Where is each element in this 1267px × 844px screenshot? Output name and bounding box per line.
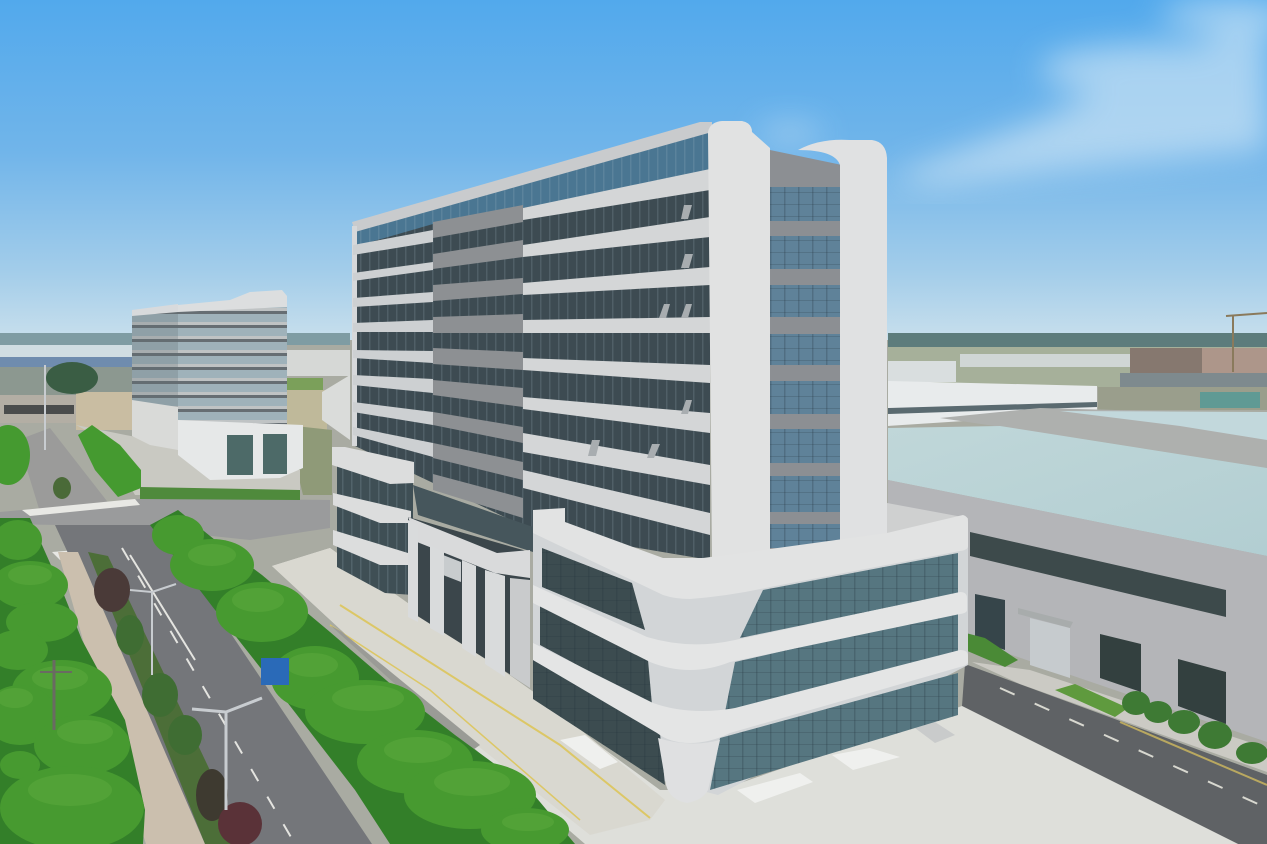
portico upper glass (413, 485, 533, 552)
sky (0, 0, 1267, 340)
secondary tower main wing (178, 300, 287, 424)
path beside median trees (330, 625, 480, 752)
distant buildings right (888, 348, 1267, 410)
hedge strip by road (94, 568, 262, 844)
factory window band (970, 532, 1226, 617)
podium glass south-west (542, 548, 645, 630)
left tree row (0, 518, 145, 844)
sidewalk (58, 552, 205, 844)
east face (770, 150, 842, 550)
factory roof (888, 426, 1267, 556)
east pier (798, 140, 887, 542)
secondary tower roof (178, 290, 287, 312)
factory wall (888, 480, 1267, 742)
tower west facade glass (353, 125, 710, 560)
floor slabs east section (523, 169, 710, 535)
portico columns (408, 520, 530, 688)
paved plaza (272, 548, 1238, 844)
crane (1226, 313, 1267, 372)
podium glass mullions (533, 548, 958, 790)
secondary tower base (178, 420, 303, 480)
podium second slab (533, 585, 967, 670)
wing top slab (332, 447, 414, 484)
factory windows (975, 594, 1005, 650)
blue road sign (261, 658, 289, 685)
median planting (88, 552, 245, 844)
top floor glass (353, 125, 710, 247)
wing mid slab (333, 493, 411, 523)
portico void (408, 517, 530, 687)
east windows (770, 187, 840, 548)
factory door (1030, 618, 1070, 678)
podium top slab (533, 508, 968, 599)
secondary tower left wing (132, 307, 178, 445)
corner pier (708, 121, 770, 560)
white mid building (888, 381, 1097, 426)
main tower (352, 121, 887, 560)
floor slabs west section (353, 230, 433, 457)
podium parapet (887, 503, 968, 540)
podium body (533, 530, 968, 795)
distant ground (0, 333, 1267, 844)
factory building (888, 408, 1267, 742)
west end cap (352, 226, 357, 446)
main road (55, 525, 372, 844)
secondary building left (132, 290, 303, 500)
shrubs along factory (962, 632, 1267, 764)
left side roads (0, 428, 372, 844)
street lamps (40, 365, 262, 810)
door panels (443, 555, 461, 582)
east window mullions (770, 187, 840, 548)
clouds (758, 0, 1267, 185)
portico beam (408, 517, 530, 578)
far left trees (0, 425, 141, 499)
entrance portico (408, 485, 533, 688)
grey spandrels (433, 205, 523, 518)
corner column (658, 738, 720, 803)
factory upper roof (940, 408, 1267, 468)
wing lower slab (333, 530, 408, 565)
west podium wing (332, 447, 414, 595)
right road (962, 662, 1267, 844)
balcony flaps (588, 205, 693, 458)
central median trees (150, 510, 575, 844)
podium glass south-east (740, 553, 958, 638)
podium main block (533, 503, 968, 803)
roof edge (352, 122, 712, 232)
podium third slab (533, 643, 968, 743)
